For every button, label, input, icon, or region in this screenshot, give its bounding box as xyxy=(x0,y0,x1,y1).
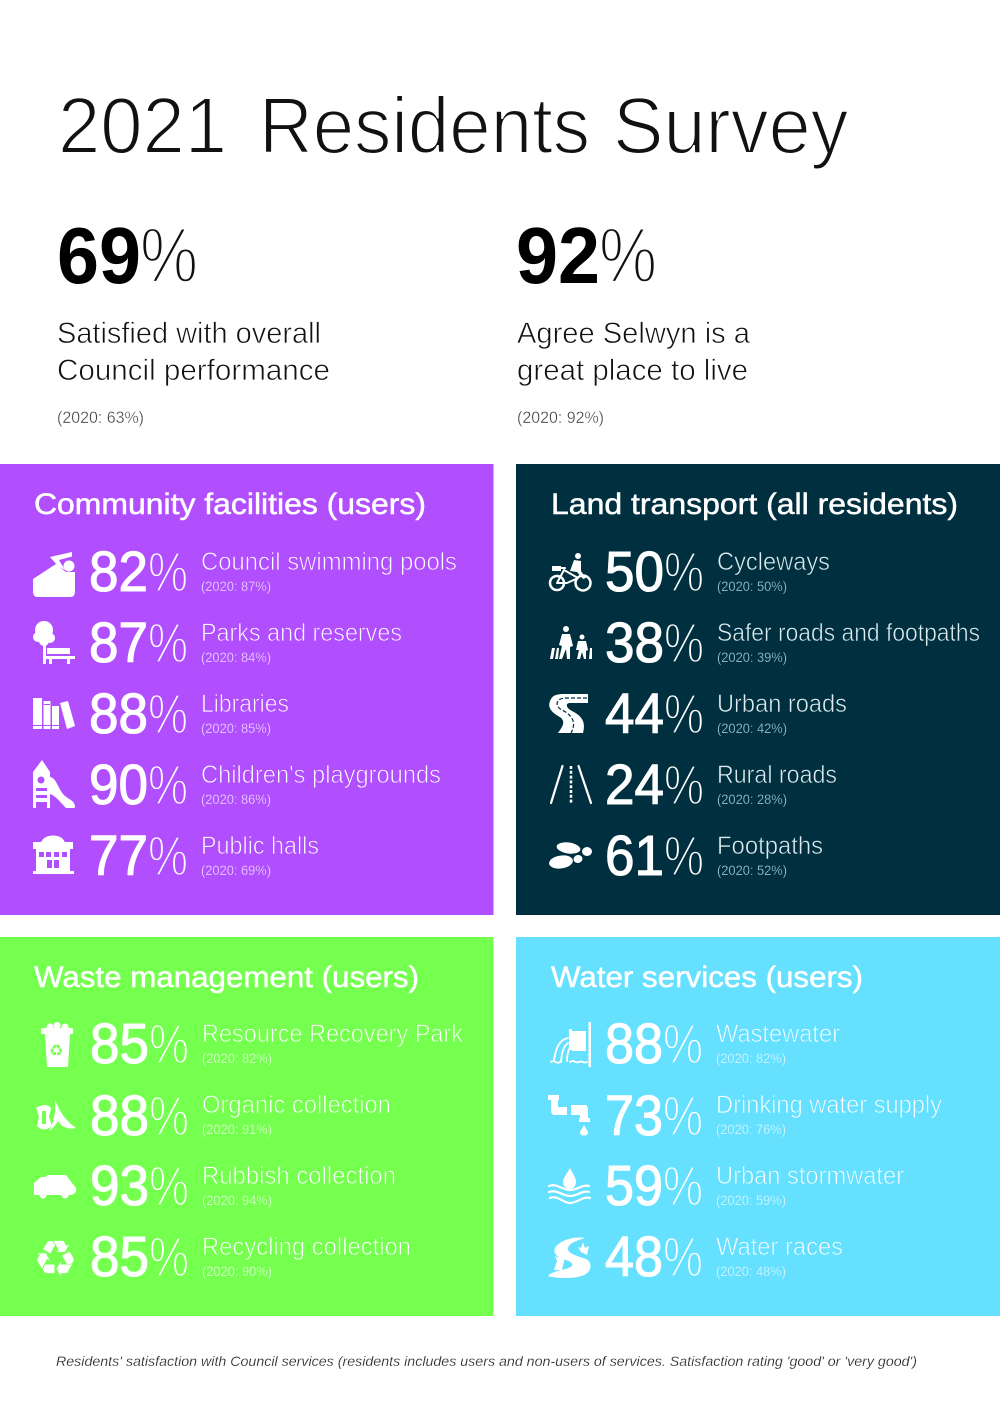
headline stat: overall Council performance xyxy=(57,211,330,427)
row: Rural roads: Rural roads xyxy=(717,761,837,789)
panel: waste management: Waste management (users) xyxy=(34,961,419,994)
row: Water races: Water races xyxy=(716,1233,843,1261)
row: Children's playgrounds xyxy=(33,753,441,817)
panel: waste management xyxy=(0,937,494,1316)
headline stat: overall Council performance: % xyxy=(140,211,198,299)
row: Rubbish collection: Rubbish collection xyxy=(202,1162,396,1190)
row: Safer roads and footpaths: Safer roads and footpaths xyxy=(717,619,980,647)
row: Council swimming pools: Council swimming pools xyxy=(201,548,457,576)
row: Libraries: (2020: 85%) xyxy=(201,721,271,736)
row: Urban roads: (2020: 42%) xyxy=(717,721,787,736)
row: Resource Recovery Park xyxy=(41,1012,463,1076)
panel: water services: Water services (users) xyxy=(551,961,863,994)
title: 2021 xyxy=(58,81,227,170)
row: Libraries xyxy=(33,682,289,746)
row: Council swimming pools xyxy=(33,540,457,604)
row: Council swimming pools: % xyxy=(148,540,188,603)
row: Rural roads: (2020: 28%) xyxy=(717,792,787,807)
row: Urban stormwater: Urban stormwater xyxy=(716,1162,904,1190)
row: Footpaths: % xyxy=(664,824,704,887)
row: Children's playgrounds: (2020: 86%) xyxy=(201,792,271,807)
row: Resource Recovery Park: ♻ xyxy=(49,1041,63,1060)
row: Organic collection: % xyxy=(149,1084,189,1147)
row: Wastewater: (2020: 82%) xyxy=(716,1051,786,1066)
row: Organic collection: Organic collection xyxy=(202,1091,391,1119)
row: Organic collection: (2020: 91%) xyxy=(202,1122,272,1137)
row: Urban stormwater: % xyxy=(663,1154,703,1217)
row: Public halls xyxy=(33,824,319,888)
row: Libraries: Libraries xyxy=(201,690,289,718)
row: Safer roads and footpaths xyxy=(550,611,980,675)
row: Drinking water supply: 73 xyxy=(605,1084,663,1148)
panel: community facilities: Community facilities (users) xyxy=(34,488,426,521)
row: Rubbish collection: (2020: 94%) xyxy=(202,1193,272,1208)
row: Rubbish collection: 93 xyxy=(90,1154,149,1218)
row: Footpaths: Footpaths xyxy=(717,832,823,860)
row: Cycleways xyxy=(550,540,830,604)
headline stat: great place to live: great place to live xyxy=(517,354,748,387)
headline stat: great place to live: 92 xyxy=(516,211,600,300)
row: Drinking water supply xyxy=(548,1084,942,1148)
row: Public halls: 77 xyxy=(89,824,148,888)
row: Children's playgrounds: Children's playgrounds xyxy=(201,761,441,789)
row: Safer roads and footpaths: 38 xyxy=(605,611,664,675)
row: Resource Recovery Park: (2020: 82%) xyxy=(202,1051,272,1066)
panel: community facilities xyxy=(0,464,494,915)
row: Parks and reserves: (2020: 84%) xyxy=(201,650,271,665)
row: Drinking water supply: (2020: 76%) xyxy=(716,1122,786,1137)
row: Resource Recovery Park: % xyxy=(149,1012,189,1075)
row: Urban stormwater xyxy=(549,1154,904,1218)
headline stat: great place to live: Agree Selwyn is a xyxy=(517,317,750,350)
row: Recycling collection xyxy=(33,1225,411,1289)
row: Parks and reserves: Parks and reserves xyxy=(201,619,402,647)
row: Water races: (2020: 48%) xyxy=(716,1264,786,1279)
row: Recycling collection: % xyxy=(149,1225,189,1288)
row: Rural roads xyxy=(551,753,837,817)
row: Parks and reserves: % xyxy=(148,611,188,674)
row: Recycling collection: (2020: 90%) xyxy=(202,1264,272,1279)
row: Rural roads: 24 xyxy=(605,753,664,817)
row: Footpaths xyxy=(548,824,823,888)
row: Parks and reserves xyxy=(33,611,402,675)
footnote: Residents' satisfaction with Council services (residents includes users and non-users of services. Satisfaction rating 'good' or 'very good') xyxy=(56,1353,917,1369)
row: Libraries: 88 xyxy=(89,682,148,746)
row: Footpaths: 61 xyxy=(605,824,664,888)
row: Public halls: Public halls xyxy=(201,832,319,860)
row: Cycleways: 50 xyxy=(605,540,664,604)
row: Footpaths: (2020: 52%) xyxy=(717,863,787,878)
row: Cycleways: Cycleways xyxy=(717,548,830,576)
headline stat: great place to live: (2020: 92%) xyxy=(517,409,604,427)
row: Public halls: % xyxy=(148,824,188,887)
row: Public halls: (2020: 69%) xyxy=(201,863,271,878)
row: Urban roads: 44 xyxy=(605,682,664,746)
row: Council swimming pools: 82 xyxy=(89,540,148,604)
row: Water races: % xyxy=(663,1225,703,1288)
row: Water races xyxy=(548,1225,843,1289)
row: Wastewater: Wastewater xyxy=(716,1020,840,1048)
headline stat: overall Council performance: Satisfied with overall xyxy=(57,317,321,350)
panel: land transport: Land transport (all residents) xyxy=(551,488,958,521)
row: Recycling collection: ♻ xyxy=(33,1230,78,1288)
headline stat: overall Council performance: 69 xyxy=(57,211,141,300)
title xyxy=(58,81,848,170)
row: Rubbish collection: % xyxy=(149,1154,189,1217)
row: Parks and reserves: 87 xyxy=(89,611,148,675)
row: Resource Recovery Park: Resource Recovery Park xyxy=(202,1020,463,1048)
row: Recycling collection: 85 xyxy=(90,1225,149,1289)
headline stat: great place to live: % xyxy=(599,211,657,299)
row: Cycleways: (2020: 50%) xyxy=(717,579,787,594)
row: Wastewater: % xyxy=(663,1012,703,1075)
row: Urban roads xyxy=(549,682,847,746)
row: Libraries: % xyxy=(148,682,188,745)
row: Water races: 48 xyxy=(605,1225,663,1289)
panel: water services xyxy=(516,937,1000,1316)
headline stat: overall Council performance: (2020: 63%) xyxy=(57,409,144,427)
row: Council swimming pools: (2020: 87%) xyxy=(201,579,271,594)
row: Children's playgrounds: % xyxy=(148,753,188,816)
row: Resource Recovery Park: 85 xyxy=(90,1012,149,1076)
row: Safer roads and footpaths: (2020: 39%) xyxy=(717,650,787,665)
row: Wastewater: 88 xyxy=(605,1012,663,1076)
row: Urban roads: Urban roads xyxy=(717,690,847,718)
row: Drinking water supply: % xyxy=(663,1084,703,1147)
row: Cycleways: % xyxy=(664,540,704,603)
row: Organic collection: 88 xyxy=(90,1084,149,1148)
title: Residents xyxy=(259,81,590,170)
row: Organic collection xyxy=(36,1084,391,1148)
row: Rubbish collection xyxy=(34,1154,396,1218)
headline stat: overall Council performance: Council performance xyxy=(57,354,330,387)
title: Survey xyxy=(613,81,848,170)
row: Urban roads: % xyxy=(664,682,704,745)
row: Drinking water supply: Drinking water supply xyxy=(716,1091,942,1119)
panel: land transport xyxy=(516,464,1000,915)
row: Wastewater xyxy=(551,1012,840,1076)
row: Children's playgrounds: 90 xyxy=(89,753,148,817)
row: Recycling collection: Recycling collection xyxy=(202,1233,411,1261)
row: Safer roads and footpaths: % xyxy=(664,611,704,674)
row: Rural roads: % xyxy=(664,753,704,816)
headline stat: great place to live xyxy=(516,211,750,427)
row: Urban stormwater: (2020: 59%) xyxy=(716,1193,786,1208)
row: Urban stormwater: 59 xyxy=(605,1154,663,1218)
